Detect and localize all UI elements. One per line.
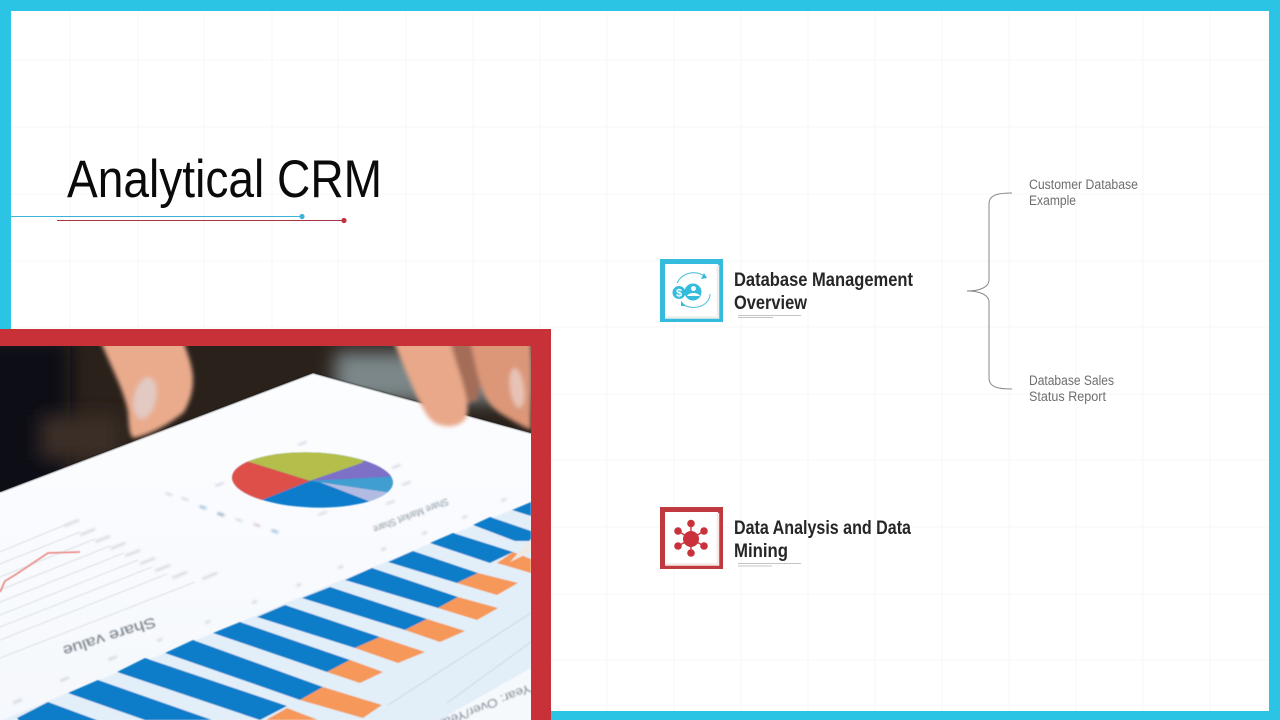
pie legend marks: [165, 441, 411, 534]
line table: [0, 525, 195, 662]
table row labels: [64, 519, 218, 580]
upside-down photo caption: share market: Share Market Share: [371, 495, 450, 534]
item 1 icon: database management: [662, 262, 720, 320]
item 2 heading: Data Analysis and Data: [734, 518, 911, 539]
bar chart backdrop: [0, 502, 531, 720]
item 2 underline: [738, 564, 801, 566]
paper sheet: [0, 373, 531, 720]
sub-item: database sales status report: Database Sales: [1029, 373, 1114, 388]
pie chart: [231, 452, 394, 508]
red photo frame: [0, 329, 551, 720]
sub-item: customer database example: Example: [1029, 193, 1076, 208]
title underline: teal and red accent lines: [11, 214, 347, 223]
item 2 icon: data analysis network: [662, 510, 720, 566]
upside-down photo caption: share value: Share value: [61, 613, 158, 659]
pen tip: [510, 539, 531, 562]
item 2 heading: [734, 518, 911, 562]
photo: hands over printed charts: [0, 340, 535, 720]
blue bars: [17, 502, 531, 720]
title: Analytical CRM: [67, 150, 382, 209]
item 2 heading: Mining: [734, 541, 788, 562]
sub-item: database sales status report: [1029, 373, 1114, 404]
bar axis tick marks: [13, 498, 506, 704]
item 1 heading: [734, 270, 914, 314]
item 1 icon: database management: $: [676, 288, 682, 300]
item 1 heading: Database Management: [734, 270, 914, 291]
item 1 heading: Overview: [734, 293, 807, 314]
orange bars: [266, 552, 531, 720]
sub-item: customer database example: [1029, 177, 1138, 208]
line chart red trace: [0, 552, 80, 592]
brace connector: [967, 193, 1012, 389]
fingers right: [393, 340, 531, 430]
item 1 underline: [738, 316, 801, 318]
sub-item: database sales status report: Status Report: [1029, 389, 1106, 404]
finger left: [100, 340, 193, 438]
sub-item: customer database example: Customer Database: [1029, 177, 1138, 192]
